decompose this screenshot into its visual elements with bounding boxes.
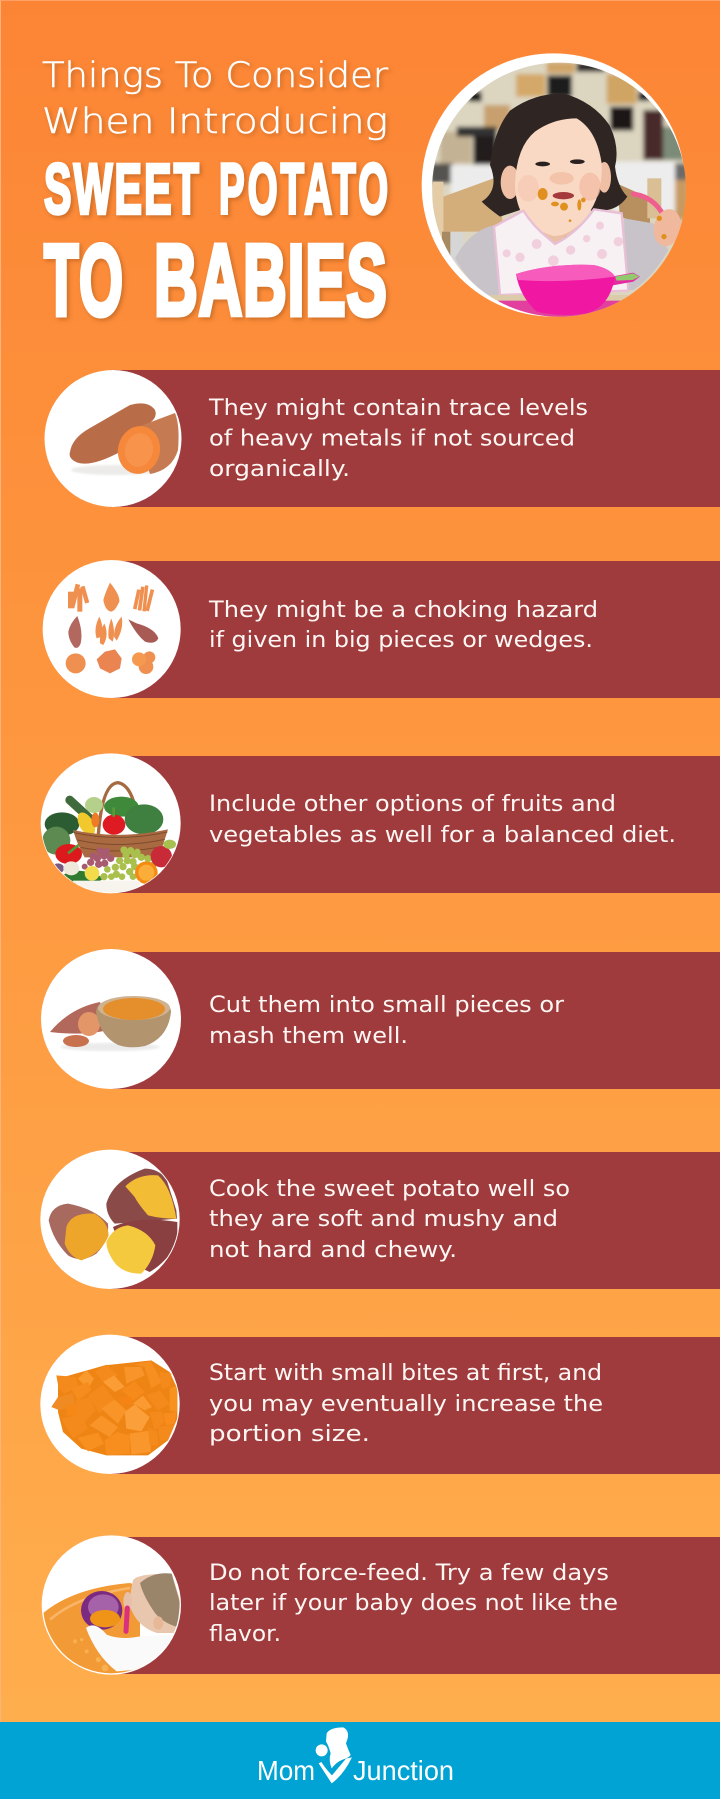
title: to babies — [44, 224, 387, 337]
panel: start small — [40, 1335, 720, 1474]
logo wordmark: Mom — [257, 1755, 315, 1786]
text: of heavy metals if not sourced — [209, 426, 575, 452]
panel: cut or mash — [41, 949, 720, 1089]
text: you may eventually increase the — [209, 1391, 603, 1417]
logo silhouette — [316, 1727, 352, 1783]
logo wordmark: Junction — [353, 1755, 454, 1786]
title: to babies: TO — [44, 225, 123, 337]
text: organically. — [209, 456, 350, 482]
panel: cook well — [40, 1150, 720, 1289]
text: Do not force-feed. Try a few days — [209, 1560, 609, 1586]
title: intro lines: Things To Consider — [42, 56, 389, 96]
spoon and hand — [633, 194, 663, 215]
title — [42, 56, 389, 337]
text: flavor. — [209, 1621, 281, 1647]
icon: fruit and vegetable basket — [41, 753, 181, 894]
photo: baby eating — [422, 53, 690, 320]
text: Cut them into small pieces or — [209, 992, 565, 1018]
title: sweet potato: POTATO — [219, 150, 388, 230]
text: vegetables as well for a balanced diet. — [209, 822, 676, 848]
food on face — [538, 188, 586, 240]
text: they are soft and mushy and — [209, 1206, 558, 1232]
icon: cooked sweet potatoes — [40, 1150, 180, 1289]
panel: choking hazard — [43, 560, 720, 698]
text — [209, 791, 676, 848]
footer — [0, 1722, 720, 1799]
title: intro lines: When Introducing — [42, 102, 388, 142]
title: intro lines — [42, 56, 389, 142]
logo wordmark — [257, 1755, 454, 1786]
text: They might contain trace levels — [208, 395, 588, 421]
pink bowl — [613, 272, 640, 286]
text: portion size. — [209, 1421, 370, 1447]
icon: sweet potatoes — [44, 370, 182, 507]
title: sweet potato: SWEET — [44, 150, 199, 229]
text: not hard and chewy. — [209, 1237, 457, 1263]
logo: MomJunction — [257, 1727, 454, 1786]
text — [209, 1176, 570, 1263]
baby bib — [494, 209, 628, 295]
icon: sweet potato cubes — [40, 1335, 180, 1474]
panel: other fruits and vegetables — [41, 753, 720, 894]
text: Cook the sweet potato well so — [209, 1176, 570, 1202]
text: They might be a choking hazard — [208, 597, 598, 623]
text — [209, 1360, 603, 1447]
title: to babies: BABIES — [154, 224, 387, 337]
icon: mashed sweet potato bowl — [41, 949, 181, 1089]
tray — [488, 295, 635, 301]
text: if given in big pieces or wedges. — [209, 627, 593, 653]
title: sweet potato — [44, 150, 388, 230]
panel: do not force-feed — [40, 1535, 720, 1680]
baby neck and face — [544, 225, 579, 242]
text: Start with small bites at first, and — [209, 1360, 602, 1386]
high chair — [443, 177, 503, 232]
text — [209, 992, 565, 1049]
icon: baby with bowl — [40, 1535, 181, 1680]
text: mash them well. — [209, 1023, 408, 1049]
baby hair — [482, 93, 627, 217]
blurred kitchen background — [430, 60, 690, 320]
panel: heavy metals — [44, 370, 720, 507]
text — [208, 597, 598, 653]
text — [209, 1560, 618, 1647]
text: later if your baby does not like the — [209, 1590, 618, 1616]
text — [208, 395, 588, 482]
text: Include other options of fruits and — [209, 791, 616, 817]
icon: sweet potato cuts — [43, 560, 181, 698]
baby sleeves — [455, 218, 668, 297]
